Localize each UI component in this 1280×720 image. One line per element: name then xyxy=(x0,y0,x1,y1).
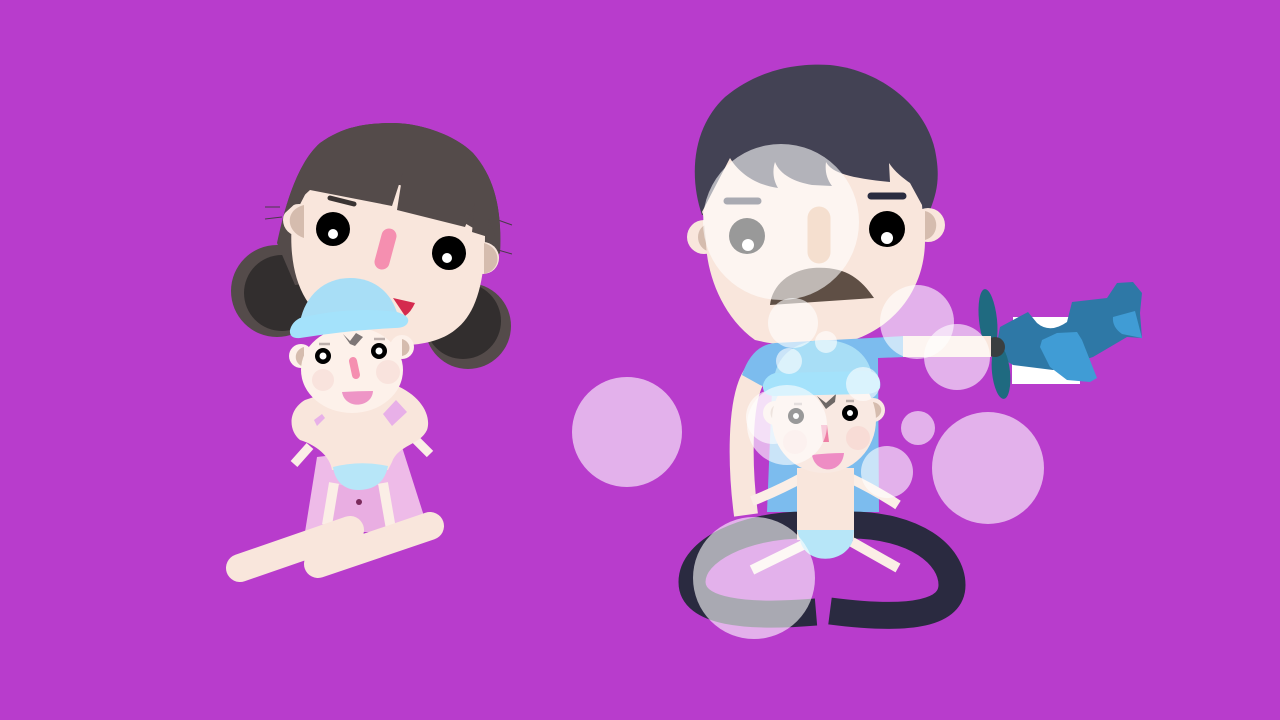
father eyes xyxy=(729,211,905,254)
small bubble on hat left xyxy=(776,348,802,374)
small bubble right xyxy=(901,411,935,445)
baby hair tuft xyxy=(343,333,363,346)
mother dress xyxy=(305,447,425,532)
mother eyebrow xyxy=(330,198,354,204)
mother legs xyxy=(240,526,430,568)
bubble on father's chin xyxy=(768,298,818,348)
father right forearm xyxy=(903,336,991,357)
mother hair buns xyxy=(231,245,511,369)
baby hair tuft xyxy=(817,394,836,409)
baby head xyxy=(772,367,876,473)
baby diaper xyxy=(797,530,854,559)
baby mouth xyxy=(812,453,844,469)
bubble by forearm xyxy=(880,285,954,359)
mother mouth xyxy=(393,298,415,316)
airplane propeller xyxy=(976,288,1013,400)
baby diaper xyxy=(333,463,388,490)
mother eyes xyxy=(316,212,466,270)
small bubble on hat top xyxy=(815,331,837,353)
baby eyebrows xyxy=(319,339,385,344)
baby eyes xyxy=(788,405,858,424)
baby hat xyxy=(290,278,408,338)
mother arms and baby torso xyxy=(292,385,428,470)
baby arms xyxy=(752,476,898,505)
airplane toy xyxy=(976,282,1142,400)
baby hat xyxy=(763,340,880,396)
mother fringe xyxy=(283,123,500,250)
father face with hair notches xyxy=(702,158,925,346)
baby nose xyxy=(353,361,356,375)
mother face xyxy=(291,185,485,345)
baby legs xyxy=(752,542,898,570)
baby eyes xyxy=(315,343,387,364)
baby ears xyxy=(763,398,885,425)
arm patches of dress xyxy=(314,400,407,426)
father hair xyxy=(695,65,938,215)
father mustache xyxy=(770,268,874,305)
large bubble left xyxy=(572,377,682,487)
baby ears xyxy=(289,335,414,368)
mother nose xyxy=(382,236,389,262)
mother figure xyxy=(231,100,520,568)
bubble on baby's face xyxy=(747,385,827,465)
baby torso xyxy=(797,468,854,540)
medium bubble near baby xyxy=(861,446,913,498)
bubble on father's leg xyxy=(693,517,815,639)
father ears xyxy=(687,208,945,254)
eyelashes xyxy=(265,207,512,254)
bubble under plane xyxy=(924,324,990,390)
father nose xyxy=(808,218,830,252)
soap bubbles xyxy=(572,144,1044,639)
baby cheeks xyxy=(783,426,870,454)
mother hair dome xyxy=(277,123,500,285)
baby eyebrows xyxy=(794,401,854,404)
large bubble on father's face xyxy=(703,144,859,300)
father left arm xyxy=(742,375,755,515)
baby legs xyxy=(327,483,392,535)
baby on mother xyxy=(289,278,414,535)
baby nose xyxy=(821,425,829,442)
airplane tail fin xyxy=(1113,311,1142,338)
baby on father xyxy=(752,340,898,570)
dress centre panel xyxy=(328,485,392,532)
small bubble on hat right xyxy=(846,367,880,401)
father eyebrows xyxy=(727,196,903,201)
baby cheeks xyxy=(312,360,400,391)
mother ears xyxy=(283,204,499,274)
airplane body xyxy=(997,282,1142,370)
father legs xyxy=(692,525,952,615)
purple bubble behind baby xyxy=(746,390,800,444)
father shirt xyxy=(742,336,905,512)
airplane wing xyxy=(1040,332,1097,382)
father figure xyxy=(687,65,1142,615)
large bubble right xyxy=(932,412,1044,524)
airplane stand bars xyxy=(1012,317,1080,384)
baby head xyxy=(301,327,403,413)
baby limbs behind arms xyxy=(294,436,430,464)
baby mouth xyxy=(342,391,373,405)
